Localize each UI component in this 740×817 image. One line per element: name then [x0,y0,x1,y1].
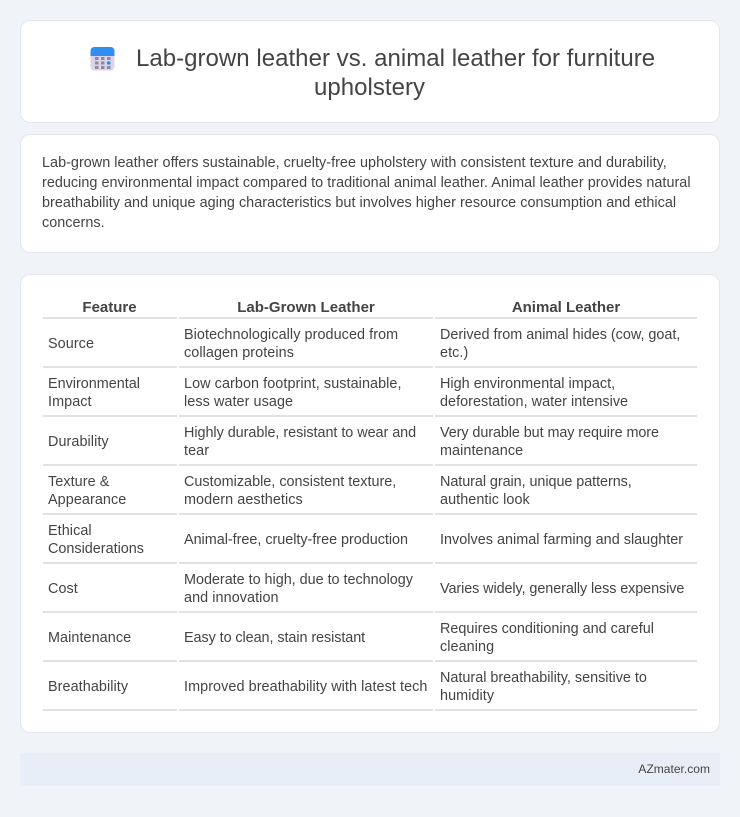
row: Maintenance: Maintenance [48,630,131,646]
row: Breathability: Natural breathability, sensitive to [440,670,647,686]
row: Source [48,327,680,361]
row: Environmental Impact: High environmental impact, [440,376,615,392]
row: Maintenance: Requires conditioning and careful [440,621,654,637]
title: upholstery [314,74,425,101]
row: Source: collagen proteins [184,345,294,361]
row: Environmental Impact [48,376,628,410]
row: Ethical Considerations: Animal-free, cruelty-free production [184,532,408,548]
row: Source: Biotechnologically produced from [184,327,398,343]
row: Texture & Appearance: authentic look [440,492,530,508]
icon: calendar [90,47,114,70]
row: Breathability [48,670,647,704]
row: Breathability: Breathability [48,679,128,695]
row: Cost: Varies widely, generally less expensive [440,581,684,597]
text block: description: reducing environmental impact compared to traditional animal leather. Animal leather provides natural [42,175,691,191]
row: Ethical Considerations [48,523,683,557]
row: Cost: Moderate to high, due to technology [184,572,413,588]
row: Environmental Impact: Impact [48,394,92,410]
row: Durability: Durability [48,434,109,450]
row: Durability: Very durable but may require more [440,425,659,441]
row: Cost: Cost [48,581,78,597]
text block: description: breathability and unique aging characteristics but involves higher resource consumption and ethical [42,195,676,211]
footer bar [20,753,720,786]
row: Ethical Considerations: Involves animal farming and slaughter [440,532,683,548]
panel: comparison table [20,274,720,733]
row: Texture & Appearance [48,474,632,508]
row: Breathability: humidity [440,688,494,704]
row: Texture & Appearance: Natural grain, unique patterns, [440,474,632,490]
text block: description [42,155,691,231]
row: Texture & Appearance: Appearance [48,492,126,508]
row: Durability: maintenance [440,443,523,459]
row: Texture & Appearance: modern aesthetics [184,492,303,508]
row: Maintenance [48,621,654,655]
panel: description [20,134,720,253]
row: Source: Derived from animal hides (cow, goat, [440,327,680,343]
row: Source: etc.) [440,345,468,361]
row: Environmental Impact: Low carbon footprint, sustainable, [184,376,402,392]
title [136,45,655,101]
table header: Lab-Grown Leather: Lab-Grown Leather [237,299,375,316]
row: Environmental Impact: Environmental [48,376,140,392]
title: Lab-grown leather vs. animal leather for furniture [136,45,655,72]
text block: description: concerns. [42,215,105,231]
row: Environmental Impact: less water usage [184,394,293,410]
panel: header [20,20,720,123]
text block: description: Lab-grown leather offers sustainable, cruelty-free upholstery with consistent texture and durability, [42,155,667,171]
row: Durability: Highly durable, resistant to wear and [184,425,416,441]
row: Ethical Considerations: Considerations [48,541,144,557]
row: Cost [48,572,684,606]
row: Breathability: Improved breathability with latest tech [184,679,428,695]
row: Cost: and innovation [184,590,279,606]
row: Durability: tear [184,443,209,459]
footer text: AZmater.com [638,762,710,776]
row: Maintenance: cleaning [440,639,494,655]
row: Durability [48,425,659,459]
row: Texture & Appearance: Texture & [48,474,109,490]
row: Maintenance: Easy to clean, stain resistant [184,630,365,646]
row: Texture & Appearance: Customizable, consistent texture, [184,474,396,490]
row: Environmental Impact: deforestation, water intensive [440,394,628,410]
row: Ethical Considerations: Ethical [48,523,92,539]
table header: Feature: Feature [82,299,137,316]
table header: Animal Leather: Animal Leather [512,299,620,316]
row: Source: Source [48,336,94,352]
